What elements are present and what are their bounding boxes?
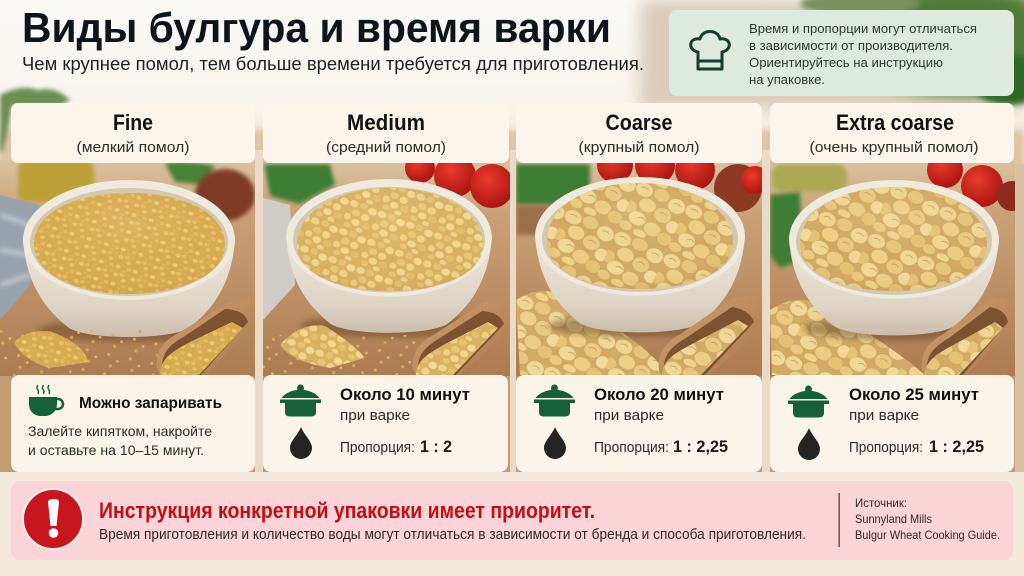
header card: coarse [516,103,762,163]
info card: extra coarse [770,375,1014,472]
header card: fine [11,103,255,163]
icon: exclamation mark [23,489,83,549]
title: Виды булгура и время варки [22,4,611,51]
callout text: Время и пропорции могут отличаться [749,21,977,36]
callout text [749,21,977,87]
info card: fine: и оставьте на 10–15 минут. [28,442,204,458]
source note: Источник: [855,496,907,510]
info card: extra coarse: 1 : 2,25 [929,437,984,456]
banner text: Время приготовления и количество воды могут отличаться в зависимости от бренда и способа приготовления. [99,527,806,543]
source note: Sunnyland Mills [855,512,932,526]
photo column: medium [263,153,514,376]
icon: water drop [544,427,566,459]
warning banner [11,481,1013,560]
info card: fine: Залейте кипятком, накройте [28,423,212,439]
banner heading: Инструкция конкретной упаковки имеет приоритет. [99,498,595,523]
info card: coarse: Пропорция: [594,440,669,456]
header card: fine: (мелкий помол) [76,139,190,156]
info card: fine [11,375,255,472]
header card: extra coarse: (очень крупный помол) [810,139,978,156]
info card: fine: Можно запаривать [79,395,222,412]
info card: medium: Пропорция: [340,440,415,456]
subtitle: Чем крупнее помол, тем больше времени требуется для приготовления. [22,53,644,74]
source note: Bulgur Wheat Cooking Guide. [855,528,1000,542]
icon: water drop [290,427,312,459]
callout text: в зависимости от производителя. [749,38,953,53]
decoration: herbs at left edge [0,88,70,152]
info card: coarse: 1 : 2,25 [673,437,728,456]
callout text: на упаковке. [749,72,825,87]
header card: medium: (средний помол) [326,139,446,156]
photo column: fine [0,160,255,376]
info card: coarse: Около 20 минут [594,385,724,404]
header card: coarse: Coarse [606,110,672,135]
info card: extra coarse: при варке [849,407,919,424]
callout: manufacturer note [669,10,1014,96]
icon: pot [788,386,829,418]
header card: medium [263,103,509,163]
source note [855,496,1000,542]
icon: steaming cup [29,385,63,416]
info card: extra coarse: Около 25 минут [849,385,979,404]
info card: coarse: при варке [594,407,664,424]
header card: extra coarse [770,103,1014,163]
info card: extra coarse: Пропорция: [849,440,923,456]
header card: fine: Fine [113,110,153,135]
info card: medium: 1 : 2 [420,437,452,456]
icon: water drop [798,428,820,460]
header card: medium: Medium [347,110,425,135]
info card: coarse [516,375,762,472]
info card: medium: при варке [340,407,410,424]
callout text: Ориентируйтесь на инструкцию [749,55,943,70]
header card: coarse: (крупный помол) [578,139,700,156]
icon: pot [534,384,575,416]
photo column: coarse [516,145,769,376]
icon: chef hat [691,32,729,69]
photo column: extra coarse [770,152,1024,376]
info card: medium [263,375,508,472]
header card: extra coarse: Extra coarse [836,110,954,135]
icon: pot [280,384,321,416]
info card: medium: Около 10 минут [340,385,470,404]
